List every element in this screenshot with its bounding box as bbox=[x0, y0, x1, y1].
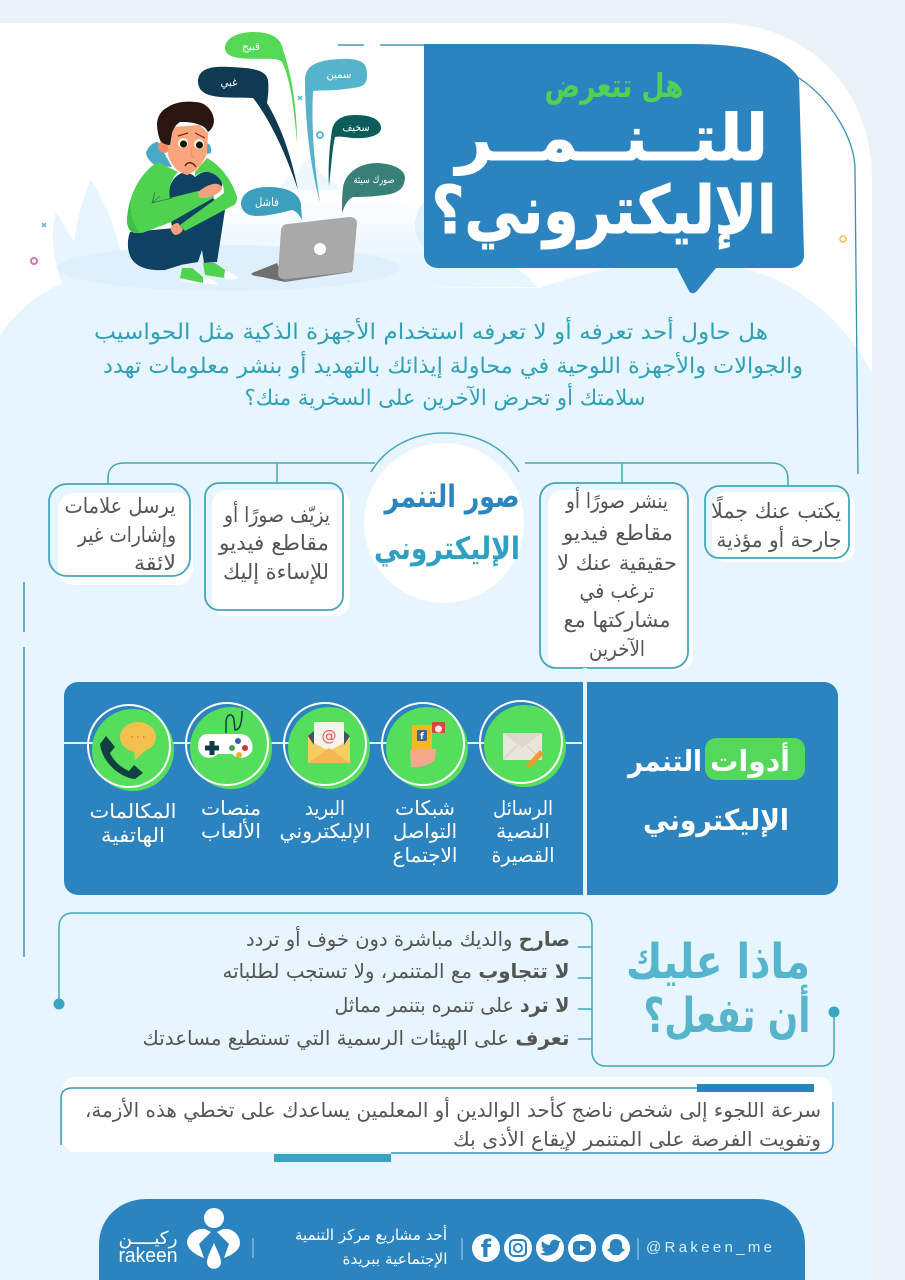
social icons: f bbox=[481, 1235, 492, 1263]
handle: @Rakeen_me bbox=[646, 1239, 772, 1256]
title speech bubble bbox=[424, 44, 804, 293]
card: offensive signals: لائقة bbox=[134, 551, 176, 575]
panel heading: أدوات bbox=[710, 742, 790, 778]
speech bubble: failure: فاشل bbox=[255, 195, 279, 209]
central circle heading: صور التنمر bbox=[383, 479, 520, 515]
tool: phone calls: المكالمات bbox=[90, 799, 176, 823]
tool: text messages bbox=[480, 701, 566, 867]
project credit: أحد مشاريع مركز التنمية bbox=[295, 1225, 447, 1244]
card: offensive signals bbox=[49, 484, 193, 585]
heading: أن تفعل؟ bbox=[644, 984, 810, 1044]
social icons bbox=[472, 1234, 630, 1263]
logo: ركيــــن bbox=[118, 1228, 178, 1249]
card: hurtful sentences: جارحة أو مؤذية bbox=[716, 526, 842, 552]
speech bubble: stupid: غبي bbox=[220, 76, 238, 89]
intro paragraph: والجوالات والأجهزة اللوحية في محاولة إيذائك بالتهديد أو بنشر معلومات تهدد bbox=[103, 351, 803, 379]
tool: text messages: النصية bbox=[496, 819, 550, 843]
card: publishes real photos: ترغب في bbox=[580, 579, 655, 603]
speech bubble: silly bbox=[329, 115, 381, 186]
card: fakes photos: مقاطع فيديو bbox=[218, 531, 329, 555]
speech bubble: ugly: قبيح bbox=[242, 40, 260, 53]
logo: rakeen bbox=[118, 1245, 178, 1267]
decorative marks bbox=[31, 96, 846, 264]
callout: seek help bbox=[61, 1077, 833, 1162]
intro paragraph bbox=[94, 317, 803, 411]
laptop bbox=[251, 217, 357, 282]
card: publishes real photos: مشاركتها مع bbox=[564, 608, 670, 632]
tool: social networks bbox=[382, 703, 468, 867]
card: publishes real photos: الآخرين bbox=[589, 637, 645, 661]
card: offensive signals: وإشارات غير bbox=[77, 523, 176, 548]
card: fakes photos: يزيّف صورًا أو bbox=[223, 501, 330, 527]
speech bubble: fat: سمين bbox=[326, 68, 352, 81]
section: forms of cyberbullying bbox=[49, 433, 855, 670]
tool: social networks: f bbox=[420, 732, 424, 742]
project credit bbox=[295, 1225, 448, 1268]
card: publishes real photos: حقيقية عنك لا bbox=[557, 551, 677, 575]
tool: phone calls: الهاتفية bbox=[101, 823, 165, 847]
logo bbox=[118, 1208, 240, 1269]
speech bubble: stupid bbox=[198, 67, 298, 190]
intro paragraph: سلامتك أو تحرض الآخرين على السخرية منك؟ bbox=[244, 383, 646, 411]
central circle heading: الإليكتروني bbox=[374, 531, 520, 567]
card: publishes real photos: مقاطع فيديو bbox=[562, 521, 673, 545]
advice list: لا تتجاوب مع المتنمر، ولا تستجب لطلباته bbox=[222, 959, 569, 983]
central circle heading bbox=[364, 443, 524, 603]
heading: ماذا عليك bbox=[626, 934, 810, 990]
tool: email: البريد bbox=[305, 796, 345, 820]
speech bubble: fat bbox=[305, 59, 367, 202]
footer bbox=[99, 1199, 805, 1280]
speech bubble: failure bbox=[241, 187, 302, 220]
panel heading bbox=[626, 738, 805, 837]
title line: electronic: الإليكتروني؟ bbox=[432, 172, 776, 250]
title line: do you face: هل تتعرض bbox=[544, 66, 684, 106]
tool: email: @ bbox=[322, 727, 336, 745]
advice list: صارح والديك مباشرة دون خوف أو تردد bbox=[246, 926, 570, 951]
illustration: boy and laptop with insult speech bubbles bbox=[57, 32, 405, 291]
title line: bullying: للتــنــمــر bbox=[453, 102, 768, 176]
card: fakes photos bbox=[205, 483, 350, 616]
card: publishes real photos: ينشر صورًا أو bbox=[565, 487, 668, 513]
tool: phone calls bbox=[88, 705, 176, 847]
heading bbox=[626, 934, 810, 1044]
tool: email bbox=[280, 703, 370, 844]
boy bbox=[127, 102, 240, 285]
speech bubble: silly: سخيف bbox=[342, 121, 370, 134]
advice list: لا ترد على تنمره بتنمر مماثل bbox=[334, 993, 570, 1017]
panel: cyberbullying tools bbox=[64, 668, 838, 895]
card: hurtful sentences: يكتب عنك جملًا bbox=[711, 495, 841, 523]
advice list bbox=[142, 926, 570, 1051]
panel heading: الإليكتروني bbox=[643, 803, 789, 837]
speech bubble: ugly bbox=[225, 32, 297, 143]
tool: gaming platforms: منصات bbox=[201, 796, 261, 820]
tool: social networks: التواصل bbox=[393, 819, 457, 843]
tool: text messages: الرسائل bbox=[493, 796, 553, 820]
tool: gaming platforms: الألعاب bbox=[201, 819, 261, 843]
tool: email: الإليكتروني bbox=[280, 819, 370, 844]
advice list: تعرف على الهيئات الرسمية التي تستطيع مساعدتك bbox=[142, 1026, 570, 1051]
tool: social networks: شبكات bbox=[395, 796, 455, 820]
speech bubble: you look bad bbox=[342, 163, 405, 213]
card: offensive signals: يرسل علامات bbox=[64, 494, 176, 518]
card: hurtful sentences bbox=[705, 486, 855, 562]
card: fakes photos: للإساءة إليك bbox=[223, 560, 329, 585]
card: publishes real photos bbox=[540, 483, 693, 670]
callout: seek help: سرعة اللجوء إلى شخص ناضج كأحد الوالدين أو المعلمين يساعدك على تخطي هذه الأزمة، bbox=[85, 1096, 821, 1123]
tool: gaming platforms bbox=[186, 703, 272, 843]
tool: text messages: القصيرة bbox=[492, 843, 554, 867]
speech bubble: you look bad: صورك سيئة bbox=[354, 175, 394, 186]
project credit: الإجتماعية ببريدة bbox=[342, 1250, 448, 1268]
section: what should you do bbox=[54, 913, 840, 1066]
intro paragraph: هل حاول أحد تعرفه أو لا تعرفه استخدام الأجهزة الذكية مثل الحواسيب bbox=[94, 317, 768, 345]
callout: seek help: وتفويت الفرصة على المتنمر لإيقاع الأذى بك bbox=[453, 1127, 821, 1151]
frame lines bbox=[24, 45, 858, 957]
tool: social networks: الاجتماع bbox=[392, 843, 458, 867]
panel heading: التنمر bbox=[626, 744, 702, 778]
